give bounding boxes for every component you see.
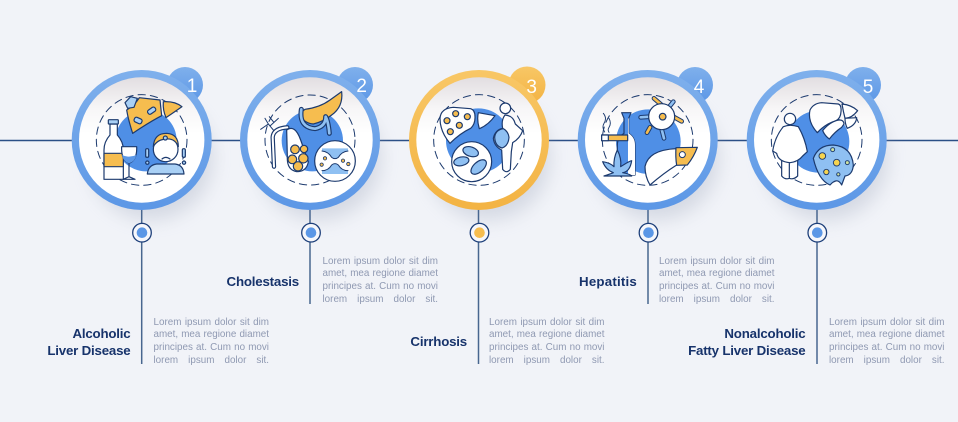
title: Nonalcoholic Fatty Liver Disease: Fatty Liver Disease bbox=[688, 343, 806, 358]
text block 2: amet, mea regione diamet bbox=[322, 268, 438, 279]
title: Hepatitis: Hepatitis bbox=[579, 274, 637, 289]
text block 1: Lorem ipsum dolor sit dim bbox=[154, 316, 269, 328]
text block 4 bbox=[659, 256, 774, 305]
text block 5: amet, mea regione diamet bbox=[829, 329, 944, 340]
step 2 marker bbox=[240, 67, 381, 304]
text block 2 bbox=[322, 256, 438, 305]
text block 3: principes at. Cum no movi bbox=[489, 342, 604, 353]
step 1 marker: 1 bbox=[187, 76, 197, 97]
icon: cirrhosis liver, blood cells and ascites bbox=[434, 95, 524, 185]
text block 3: lorem ipsum dolor sit. bbox=[489, 355, 604, 366]
title: Alcoholic Liver Disease bbox=[47, 326, 130, 358]
text block 2: Lorem ipsum dolor sit dim bbox=[322, 256, 438, 267]
step 5 marker: 5 bbox=[863, 77, 873, 98]
step 4 marker bbox=[578, 67, 719, 304]
step 1 marker bbox=[72, 67, 213, 364]
text block 5: lorem ipsum dolor sit. bbox=[829, 355, 944, 366]
icon: pancreas and gallstones bbox=[261, 92, 355, 185]
title: Nonalcoholic Fatty Liver Disease bbox=[688, 326, 806, 358]
icon: obesity and fatty liver bbox=[771, 95, 862, 185]
icon: hepatitis causes bbox=[602, 95, 697, 185]
horizontal timeline bbox=[0, 140, 958, 142]
step 3 marker: 3 bbox=[526, 77, 537, 98]
text block 3 bbox=[489, 316, 604, 366]
text block 2: principes at. Cum no movi bbox=[322, 281, 438, 292]
text block 2: lorem ipsum dolor sit. bbox=[322, 294, 438, 305]
text block 1: amet, mea regione diamet bbox=[154, 329, 269, 340]
text block 4: principes at. Cum no movi bbox=[659, 281, 774, 292]
title: Alcoholic Liver Disease: Alcoholic bbox=[72, 326, 130, 340]
title: Nonalcoholic Fatty Liver Disease: Nonalcoholic bbox=[724, 326, 806, 340]
step 4 marker: 4 bbox=[694, 77, 705, 98]
text block 4: Lorem ipsum dolor sit dim bbox=[659, 256, 774, 267]
text block 1: lorem ipsum dolor sit. bbox=[154, 355, 269, 366]
text block 5 bbox=[829, 316, 944, 366]
text block 4: lorem ipsum dolor sit. bbox=[659, 294, 774, 305]
text block 1 bbox=[154, 316, 269, 366]
text block 3: Lorem ipsum dolor sit dim bbox=[489, 316, 604, 328]
step 2 marker: 2 bbox=[356, 76, 367, 97]
icon: alcohol and liver damage bbox=[96, 95, 187, 185]
step 3 marker bbox=[409, 66, 550, 364]
text block 5: Lorem ipsum dolor sit dim bbox=[829, 316, 944, 328]
step 5 marker bbox=[747, 67, 888, 364]
text block 5: principes at. Cum no movi bbox=[829, 342, 944, 353]
title: Cirrhosis: Cirrhosis bbox=[410, 334, 467, 349]
text block 3: amet, mea regione diamet bbox=[489, 329, 604, 340]
title: Alcoholic Liver Disease: Liver Disease bbox=[47, 343, 130, 358]
title: Cholestasis: Cholestasis bbox=[227, 274, 299, 289]
text block 1: principes at. Cum no movi bbox=[154, 342, 269, 353]
text block 4: amet, mea regione diamet bbox=[659, 268, 774, 279]
